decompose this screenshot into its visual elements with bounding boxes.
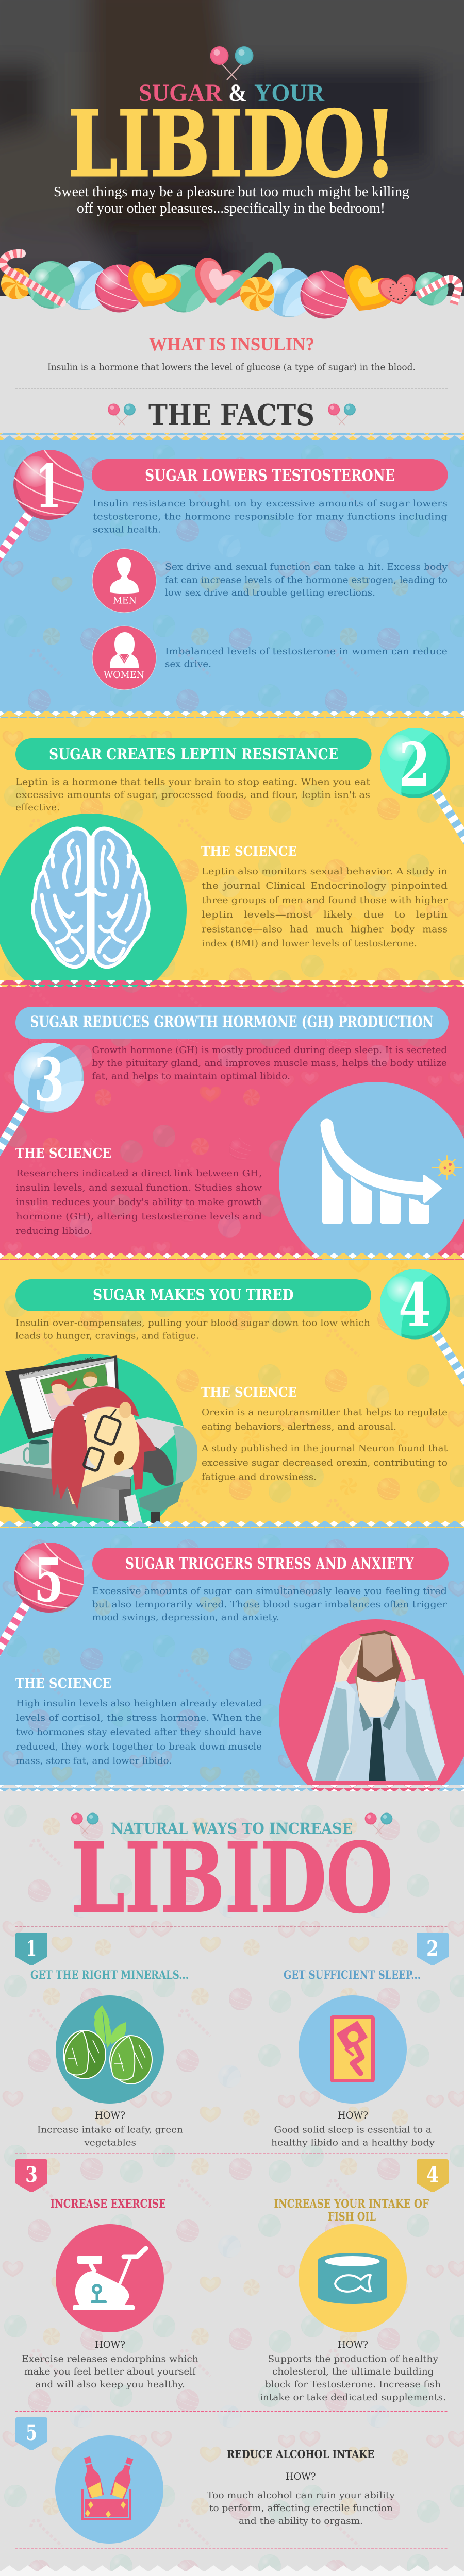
heading pill <box>92 1548 449 1580</box>
subtitle: Sweet things may be a pleasure but too much might be killing <box>54 184 409 200</box>
heading pill: SUGAR MAKES YOU TIRED <box>93 1286 294 1304</box>
panel: references <box>0 2565 464 2576</box>
circle: illustration background <box>0 1354 187 1547</box>
icon: brain <box>33 828 148 967</box>
heading: the science: THE SCIENCE <box>201 1385 297 1400</box>
science text: A study published in the journal Neuron found that <box>201 1443 448 1454</box>
tip text: Too much alcohol can ruin your ability <box>207 2490 395 2501</box>
icon: men <box>92 549 156 613</box>
icon: bottles in ice bucket <box>55 2435 163 2544</box>
tip 5 alcohol <box>15 2417 395 2544</box>
tip text <box>22 2353 198 2390</box>
badge 1 <box>15 1933 47 1965</box>
body text <box>93 498 448 535</box>
science text <box>16 1168 262 1236</box>
candy border <box>0 253 459 322</box>
tip heading: REDUCE ALCOHOL INTAKE <box>227 2448 374 2461</box>
lollipop 3 <box>0 1041 84 1154</box>
science text: excessive sugar decreased orexin, contributing to <box>202 1458 448 1468</box>
tip text: cholesterol, the ultimate building <box>272 2366 434 2377</box>
icon: leafy greens <box>56 1995 164 2104</box>
panel: fact 5 <box>0 1521 464 1813</box>
lollipop 5: 5 <box>34 1546 63 1616</box>
body text: leads to hunger, cravings, and fatigue. <box>15 1330 199 1342</box>
section background: gray intro <box>0 296 464 435</box>
lollipop 3: 3 <box>34 1045 64 1115</box>
tip heading: GET SUFFICIENT SLEEP... <box>284 1969 421 1982</box>
panel: fact 1 <box>0 433 464 718</box>
tip text <box>207 2490 395 2527</box>
lollipop 1: 1 <box>36 452 61 522</box>
icon: women: WOMEN <box>104 669 144 681</box>
science text: mass, store fat, and lower libido. <box>16 1756 172 1766</box>
woman <box>51 1386 174 1510</box>
science text: Researchers indicated a direct link between GH, <box>16 1168 262 1179</box>
science text: insulin levels, and sexual function. Studies show <box>16 1182 262 1193</box>
tip text <box>271 2125 435 2148</box>
body text: testosterone, the hormone responsible for many functions including <box>93 511 448 522</box>
body text: Leptin is a hormone that tells your brain to stop eating. When you eat <box>15 777 371 787</box>
body text: Excessive amounts of sugar can simultaneously leave you feeling tired <box>92 1586 447 1597</box>
chart: declining bars with arrow <box>322 1125 442 1224</box>
circle: illustration background <box>279 1619 464 1813</box>
heading pill <box>15 738 371 770</box>
badge 5: 5 <box>26 2420 37 2445</box>
tip text: and will also keep you healthy. <box>35 2379 185 2390</box>
tip text: make you feel better about yourself <box>24 2366 196 2377</box>
text: women <box>165 646 448 670</box>
icon: sleeping person <box>299 1995 407 2104</box>
science text <box>16 1698 262 1766</box>
heading: libido: LIBIDO <box>71 1822 393 1934</box>
science text: reduced, they work together to break down muscle <box>16 1741 262 1752</box>
badge 5 <box>15 2417 47 2450</box>
tip text: Supports the production of healthy <box>268 2353 439 2365</box>
lollipop 2 <box>379 727 464 842</box>
text: men <box>165 562 448 598</box>
body text: Insulin over-compensates, pulling your blood sugar down too low which <box>15 1318 370 1328</box>
body text: effective. <box>15 802 60 813</box>
lollipop icons <box>71 1812 392 1834</box>
tip text: and the ability to orgasm. <box>239 2516 363 2527</box>
science text: hormone (GH), altering testosterone levels and <box>16 1211 262 1222</box>
body text: excessive amounts of sugar, processed foods, and flour, leptin isn't as <box>15 789 370 801</box>
tip heading: GET THE RIGHT MINERALS... <box>30 1969 189 1982</box>
science text: leptin levels—most likely due to leptin <box>202 909 448 920</box>
badge 4 <box>417 2159 449 2192</box>
how label: HOW? <box>338 2339 368 2350</box>
tip text: vegetables <box>84 2137 136 2148</box>
body text: Insulin resistance brought on by excessive amounts of sugar lowers <box>93 498 448 509</box>
science text: three groups of men and found those with higher <box>202 895 448 906</box>
desk <box>0 1417 184 1521</box>
tip text <box>260 2353 446 2403</box>
tip text <box>37 2125 183 2148</box>
text: women: sex drive. <box>165 658 211 670</box>
tip text: block for Testosterone. Increase fish <box>265 2379 441 2390</box>
science text: index (BMI) and lower levels of testosterone. <box>202 938 417 949</box>
illustration: tired woman at desk <box>0 1355 197 1523</box>
tip text: Increase intake of leafy, green <box>37 2125 183 2135</box>
how label: HOW? <box>286 2471 316 2482</box>
lollipop 2: 2 <box>399 730 430 800</box>
science text: Orexin is a neurotransmitter that helps to regulate <box>202 1407 448 1418</box>
body text <box>15 1318 370 1342</box>
badge 3 <box>15 2159 47 2192</box>
heading: the facts: THE FACTS <box>148 398 314 432</box>
body text: but also temporarily wired. Those blood sugar imbalances often trigger <box>92 1599 447 1610</box>
heading pill: SUGAR LOWERS TESTOSTERONE <box>145 467 395 485</box>
how label: HOW? <box>95 2339 125 2350</box>
tip text: to perform, affecting erectile function <box>209 2503 393 2514</box>
monitor: File Edit Object Effect View Window Help <box>20 1355 94 1377</box>
circle: brain background <box>0 814 187 1006</box>
science text: levels of cortisol, the stress hormone. When the <box>16 1713 262 1723</box>
tip heading <box>274 2197 429 2224</box>
heading: the science: THE SCIENCE <box>15 1676 111 1691</box>
body text <box>15 777 371 813</box>
body text: by the pituitary gland, and improves muscle mass, helps the body utilize <box>92 1058 447 1069</box>
science text: resistance—also had much higher body mass <box>202 924 448 935</box>
lollipop 4: 4 <box>399 1270 431 1341</box>
badge 3: 3 <box>25 2162 38 2187</box>
body text: mood swings, depression, and anxiety. <box>92 1612 279 1623</box>
chair <box>124 1426 197 1523</box>
badge 1: 1 <box>26 1936 37 1961</box>
body text <box>92 1586 447 1623</box>
how label: HOW? <box>95 2110 125 2121</box>
body text: Growth hormone (GH) is mostly produced during deep sleep. It is secreted <box>92 1045 447 1056</box>
panel: fact 2 <box>0 711 464 1006</box>
science text: the journal Clinical Endocrinology pinpointed <box>202 880 448 891</box>
header photo: blurred bedroom scene <box>0 0 464 309</box>
tip text: intake or take dedicated supplements. <box>260 2392 446 2403</box>
tip 1 minerals <box>15 1933 189 2148</box>
science text: eating behaviors, alertness, and arousal. <box>202 1421 396 1432</box>
panel: fact 3 <box>0 980 464 1276</box>
icon: women <box>92 626 156 690</box>
text: men: Sex drive and sexual function can take a hit. Excess body <box>165 562 448 572</box>
body text: sexual health. <box>93 524 161 535</box>
heading: the science: THE SCIENCE <box>201 844 297 859</box>
title: sugar and your: & <box>228 79 247 107</box>
badge 2: 2 <box>426 1936 439 1961</box>
tip text: Exercise releases endorphins which <box>22 2353 198 2365</box>
badge 2 <box>417 1933 449 1965</box>
heading: the science: THE SCIENCE <box>15 1146 111 1161</box>
heading pill <box>92 459 448 491</box>
badge 4: 4 <box>426 2162 439 2187</box>
tip heading: INCREASE EXERCISE <box>51 2197 166 2211</box>
tip heading: FISH OIL <box>328 2210 376 2224</box>
icon: fish oil can <box>299 2224 407 2332</box>
science text: two hormones stay elevated after they should have <box>16 1727 262 1737</box>
lollipop icon: header <box>210 46 254 80</box>
science text <box>202 866 448 949</box>
text: insulin definition: Insulin is a hormone that lowers the level of glucose (a type of sugar) in the blood. <box>47 362 416 373</box>
icon: men: MEN <box>113 595 137 606</box>
body text <box>92 1045 447 1082</box>
text: women: Imbalanced levels of testosterone in women can reduce <box>165 646 448 657</box>
tip heading: INCREASE YOUR INTAKE OF <box>274 2197 429 2211</box>
icon: sun <box>432 1156 462 1179</box>
icon: exercise bike <box>56 2224 164 2332</box>
subheading: NATURAL WAYS TO INCREASE <box>111 1820 353 1837</box>
tip 3 exercise <box>15 2159 198 2390</box>
lollipop 5 <box>0 1540 86 1654</box>
subtitle <box>54 184 409 216</box>
heading pill <box>15 1279 371 1311</box>
panel: natural ways <box>0 1785 464 2572</box>
subtitle: off your other pleasures...specifically in the bedroom! <box>77 200 385 216</box>
tip text: healthy libido and a healthy body <box>271 2137 435 2148</box>
heading pill <box>15 1007 449 1039</box>
body text: fat, and helps to maintain optimal libido. <box>92 1071 290 1082</box>
tip text: Good solid sleep is essential to a <box>274 2125 432 2135</box>
tip 4 fish oil <box>260 2159 449 2403</box>
heading: what is insulin: WHAT IS INSULIN? <box>149 334 314 354</box>
science text <box>201 1407 448 1483</box>
mug <box>24 1439 49 1465</box>
science text: insulin reduces your body's ability to make growth <box>16 1197 262 1208</box>
lollipop 4 <box>379 1268 464 1384</box>
panel: fact 4 <box>0 1253 464 1547</box>
title: sugar and your: YOUR <box>254 79 325 107</box>
science text: Leptin also monitors sexual behavior. A study in <box>202 866 448 877</box>
science text: High insulin levels also heighten already elevated <box>16 1698 262 1709</box>
monitor <box>5 1355 120 1439</box>
science text: fatigue and drowsiness. <box>202 1471 317 1483</box>
illustration: stressed man <box>307 1630 445 1781</box>
circle: chart background <box>279 1082 464 1276</box>
tip 2 sleep <box>271 1933 449 2148</box>
heading pill: SUGAR CREATES LEPTIN RESISTANCE <box>49 745 338 764</box>
how label: HOW? <box>338 2110 368 2121</box>
text: men: low sex drive and trouble getting erections. <box>165 587 375 598</box>
title: sugar and your: SUGAR <box>139 79 223 107</box>
text: men: fat can increase levels of the hormone estrogen, leading to <box>165 575 448 585</box>
lollipop 1 <box>0 448 85 561</box>
science text: reducing libido. <box>16 1226 92 1236</box>
